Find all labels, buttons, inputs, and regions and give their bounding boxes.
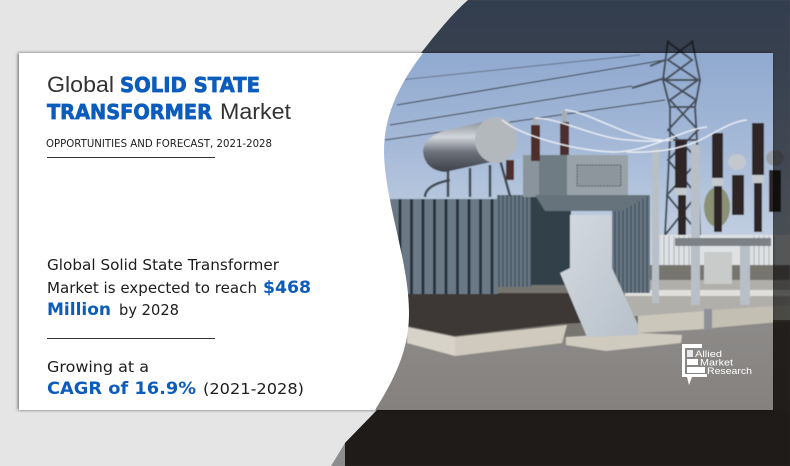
background trees — [704, 187, 730, 227]
conservator tank supports — [425, 160, 510, 197]
CAGR text — [47, 358, 304, 398]
subtitle: OPPORTUNITIES AND FORECAST, 2021-2028 — [46, 138, 272, 150]
title: Market — [220, 99, 291, 124]
market size text: Market is expected to reach — [47, 279, 257, 297]
logo: Allied Market Research: Research — [707, 366, 752, 377]
title: TRANSFORMER — [47, 100, 212, 124]
market size text: by 2028 — [119, 301, 179, 319]
switchyard insulators — [675, 123, 781, 235]
divider: title — [47, 157, 215, 158]
asphalt — [375, 322, 790, 410]
market size text: $468 — [263, 278, 311, 297]
CAGR text: CAGR of 16.9% — [47, 379, 197, 398]
panel: card with shadow — [19, 53, 773, 410]
midground yard — [406, 264, 790, 343]
white cables — [502, 110, 747, 152]
background fence — [660, 235, 790, 267]
switchyard posts — [652, 145, 784, 305]
market size text — [47, 256, 311, 319]
radiators — [390, 199, 498, 294]
dark backdrop: darkened photo — [300, 0, 790, 466]
backdrop wedge — [331, 443, 345, 466]
title — [47, 72, 291, 124]
title: Global — [47, 72, 114, 97]
divider: growth — [47, 338, 215, 339]
bushings — [506, 122, 569, 180]
CAGR text: Growing at a — [47, 358, 149, 376]
transformer head box — [523, 155, 539, 197]
logo: Allied Market Research: Market — [700, 358, 733, 368]
logo: Allied Market Research — [682, 344, 752, 385]
concrete bund — [407, 327, 455, 356]
photo: transformer substation — [375, 53, 773, 410]
market size text: Global Solid State Transformer — [47, 256, 280, 274]
power lines — [385, 55, 665, 140]
conservator tank — [423, 122, 500, 172]
CAGR text: (2021-2028) — [203, 380, 304, 398]
market size text: Million — [47, 300, 111, 319]
insulator collars — [675, 175, 764, 195]
title: SOLID STATE — [120, 73, 260, 97]
sky — [384, 0, 790, 266]
logo: Allied Market Research: Allied — [695, 349, 722, 360]
lattice tower — [632, 40, 700, 235]
dark ground under transformer — [408, 292, 581, 336]
duct — [560, 215, 638, 337]
